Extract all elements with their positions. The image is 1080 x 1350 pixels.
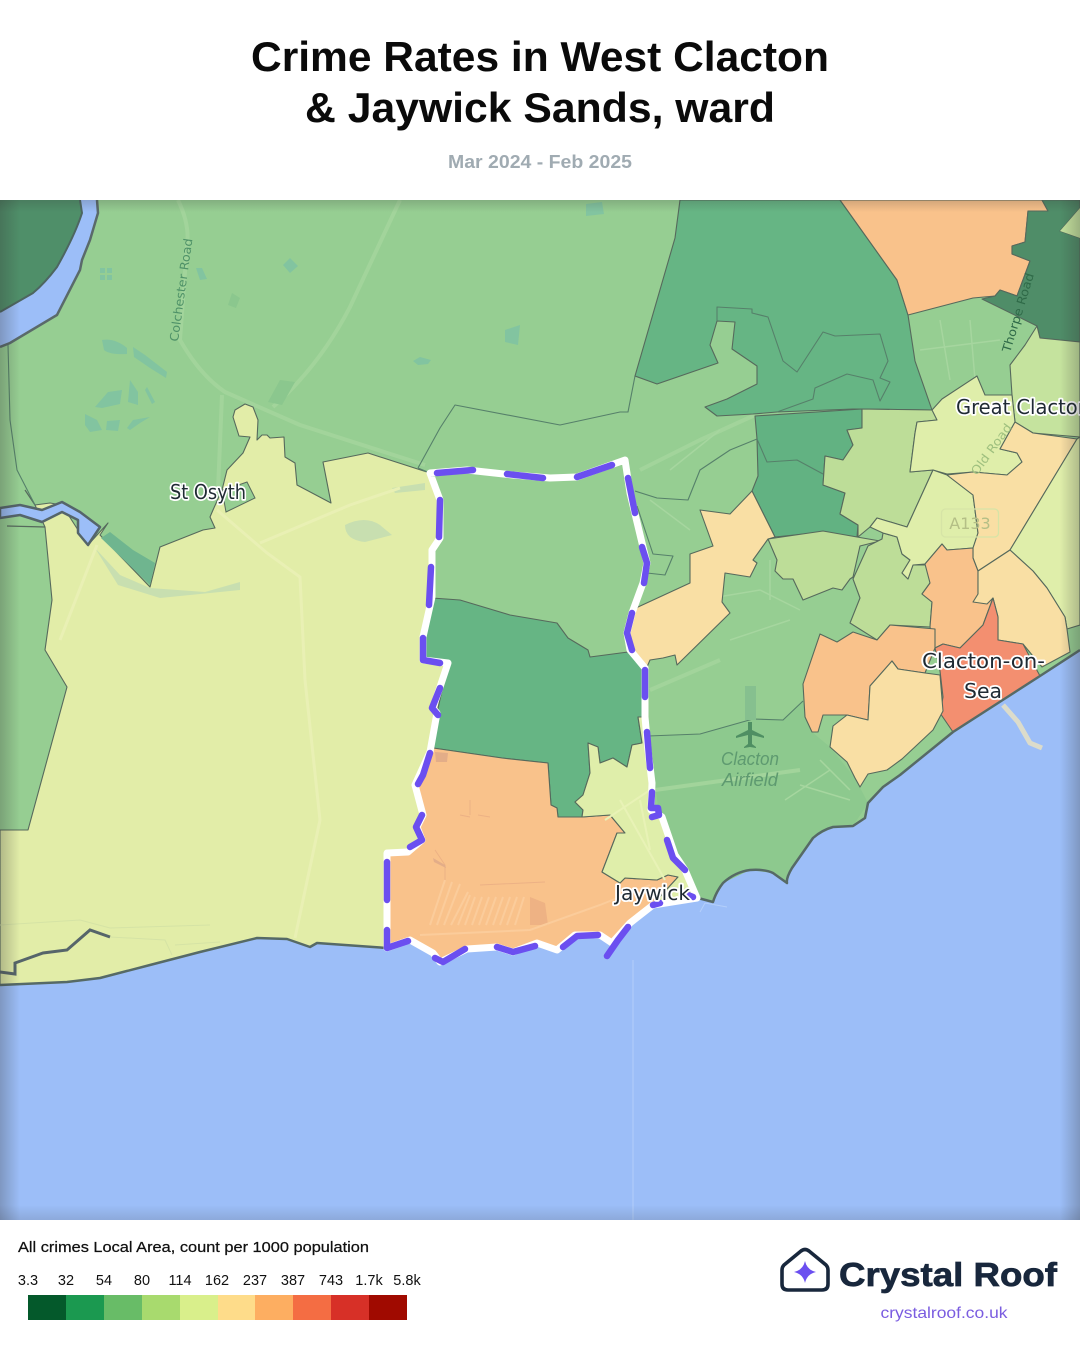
map: [0, 200, 1080, 1220]
road labels: Colchester Road: [167, 237, 195, 342]
north east lime area: [1010, 326, 1080, 437]
label: Clacton Airfield: Airfield: [721, 770, 779, 790]
purple dashes: [387, 465, 693, 962]
legend labels: 387: [281, 1273, 305, 1289]
icon: airfield: [736, 686, 764, 748]
Clacton east pale orange area: [973, 550, 1070, 667]
road sign: A133: A133: [949, 514, 991, 533]
lime area 2: [768, 531, 880, 600]
label: Clacton-on-Sea: Clacton-on-: [922, 649, 1045, 673]
top right lime corner: [1060, 208, 1080, 238]
internal boundaries: [717, 307, 890, 412]
legend colour scale: [28, 1295, 407, 1320]
A133 pale area: [870, 470, 978, 579]
Jaywick street patterns: [420, 752, 665, 935]
legend: [18, 1239, 421, 1320]
title: & Jaywick Sands, ward: [305, 84, 775, 131]
lime area 1: [823, 409, 937, 537]
airfield darker green: [648, 701, 868, 902]
small creek: [0, 490, 100, 545]
mid green large area: [635, 200, 932, 416]
label: Clacton Airfield: Clacton: [721, 749, 779, 769]
website url: crystalroof.co.uk: [880, 1305, 1009, 1322]
legend title: All crimes Local Area, count per 1000 population: [18, 1239, 369, 1256]
Great Clacton pale area: [910, 376, 1022, 475]
road labels: [167, 237, 1037, 478]
legend labels: 5.8k: [393, 1273, 421, 1289]
top right dark green area: [982, 200, 1080, 342]
legend labels: [18, 1273, 421, 1289]
ward: left yellow area: [0, 404, 448, 985]
title: [251, 33, 829, 131]
legend labels: 162: [205, 1273, 229, 1289]
logo: [782, 1250, 1058, 1322]
legend labels: 54: [96, 1273, 112, 1289]
legend labels: 743: [319, 1273, 343, 1289]
ward middle green area: [423, 598, 645, 817]
legend labels: 32: [58, 1273, 74, 1289]
label: Clacton-on-Sea: [922, 649, 1045, 703]
label: Clacton-on-Sea: Sea: [964, 679, 1002, 703]
legend labels: 114: [168, 1273, 192, 1289]
subtitle: date range: Mar 2024 - Feb 2025: [448, 152, 632, 172]
label: Clacton Airfield: [721, 749, 779, 790]
sea faint line: [633, 903, 727, 1220]
sea: [0, 650, 1080, 1220]
road labels: Thorpe Road: [999, 271, 1037, 355]
west boundary lines: [8, 345, 635, 505]
legend labels: 237: [243, 1273, 267, 1289]
Clacton-on-Sea red area: [935, 598, 1040, 732]
legend labels: 1.7k: [355, 1273, 383, 1289]
west of Clacton orange area: [803, 625, 935, 732]
white boundary line: [387, 460, 697, 962]
label: St Osyth: St Osyth: [170, 480, 246, 504]
inland sea wall: [0, 930, 110, 974]
mid green lower area: [752, 409, 862, 537]
coastline: [0, 650, 1080, 985]
logo wordmark: Crystal Roof: [839, 1256, 1058, 1293]
east pale area: [1010, 437, 1080, 629]
icon: house: [782, 1250, 828, 1290]
Old Road pale orange area: [947, 422, 1077, 571]
West Clacton pale orange area: [627, 491, 775, 667]
Clacton central orange area: [922, 544, 993, 648]
pier: [1003, 705, 1042, 748]
ward Jaywick pale area: [575, 717, 697, 905]
Clacton lower pale area: [830, 661, 943, 787]
label: Jaywick: Jaywick: [613, 881, 690, 905]
legend labels: 80: [134, 1273, 150, 1289]
base map roads and lakes: [85, 200, 1000, 800]
title: Crime Rates in West Clacton: [251, 33, 829, 80]
road labels: Old Road: [968, 421, 1015, 478]
top right orange area: [840, 200, 1048, 315]
ward boundary: [387, 460, 697, 962]
legend labels: 3.3: [18, 1273, 38, 1289]
lime area 3: [850, 533, 932, 640]
river estuary, top left: [0, 200, 98, 347]
east lines: [634, 438, 804, 736]
road sign: A133: [942, 509, 998, 537]
ward orange area: [387, 748, 678, 962]
yellow area details: [0, 482, 425, 955]
